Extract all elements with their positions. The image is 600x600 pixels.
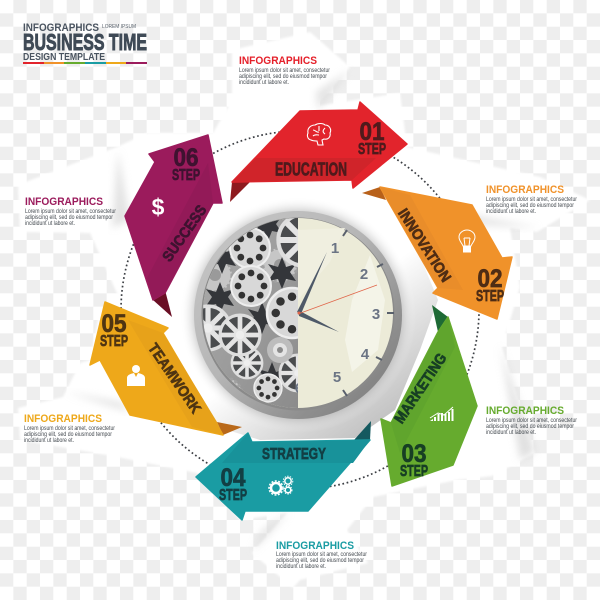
header title: LOREM IPSUM	[102, 24, 136, 30]
gear mechanism half	[203, 218, 298, 408]
arrow 04: strategy: STRATEGY	[262, 446, 326, 463]
icon: light bulb	[459, 230, 475, 252]
text block: yellow: adipiscing elit, sed do eiusmod tempor	[24, 432, 112, 438]
icon: brain	[307, 124, 331, 145]
text block: purple: adipiscing elit, sed do eiusmod tempor	[25, 215, 113, 221]
icon: bar chart	[430, 407, 454, 421]
icon: gears	[269, 476, 293, 495]
clock face: 1	[331, 240, 339, 257]
arrow 04: strategy	[196, 421, 371, 520]
text block: teal: Lorem ipsum dolor sit amet, consectetur	[276, 552, 367, 558]
text block: teal: INFOGRAPHICS	[276, 540, 354, 552]
arrow 03: marketing: 03	[402, 440, 426, 468]
clock face: 3	[372, 306, 380, 323]
arrow 06: success: STEP	[172, 167, 200, 184]
arrow 01: education: STEP	[358, 141, 386, 158]
text block: orange: adipiscing elit, sed do eiusmod tempor	[486, 203, 574, 209]
text block: green	[486, 405, 577, 436]
text block: yellow: incididunt ut labore et.	[24, 438, 74, 444]
header title: INFOGRAPHICS	[23, 22, 99, 34]
arrow 03: marketing: MARKETING	[391, 350, 451, 427]
arrow 05: teamwork: STEP	[100, 333, 128, 350]
text block: purple: Lorem ipsum dolor sit amet, consectetur	[25, 209, 116, 215]
arrow 02: innovation: STEP	[476, 288, 504, 305]
icon: person	[127, 365, 145, 386]
header title	[23, 22, 147, 64]
clock face: 2	[360, 266, 368, 283]
arrow 05: teamwork: TEAMWORK	[144, 340, 204, 417]
text block: orange: incididunt ut labore et.	[486, 209, 536, 215]
arrow 06: success	[125, 135, 222, 317]
clock face	[203, 218, 394, 408]
arrow 02: innovation: 02	[478, 265, 502, 293]
arrow 03: marketing: STEP	[400, 463, 428, 480]
arrow 05: teamwork	[90, 302, 242, 435]
text block: yellow: INFOGRAPHICS	[24, 413, 102, 425]
header title: DESIGN TEMPLATE	[23, 52, 105, 63]
header title: BUSINESS TIME	[23, 29, 147, 55]
arrow 04: strategy: 04	[220, 464, 246, 492]
dotted orbit circle	[121, 131, 479, 489]
arrow 04: strategy: STEP	[219, 487, 247, 504]
clock hands	[297, 252, 377, 332]
arrow 01: education	[230, 102, 407, 202]
icon: dollar sign: $	[152, 194, 165, 220]
tick marks	[343, 230, 394, 396]
text block: purple: incididunt ut labore et.	[25, 221, 75, 227]
text block: red	[239, 55, 330, 86]
text block: teal	[276, 540, 367, 570]
arrow 06: success: SUCCESS	[159, 202, 210, 265]
arrow 03: marketing	[381, 305, 477, 486]
arrow 02: innovation: INNOVATION	[394, 206, 454, 285]
text block: green: incididunt ut labore et.	[486, 430, 536, 436]
text block: yellow	[24, 413, 115, 444]
arrow 01: education: 01	[360, 118, 385, 146]
text block: purple	[25, 196, 116, 227]
clock bezel backing	[158, 184, 438, 440]
text block: red: Lorem ipsum dolor sit amet, consectetur	[239, 68, 330, 74]
text block: red: adipiscing elit, sed do eiusmod tempor	[239, 74, 327, 80]
text block: yellow: Lorem ipsum dolor sit amet, consectetur	[24, 426, 115, 432]
text block: red: INFOGRAPHICS	[239, 55, 317, 67]
clock face: 5	[333, 369, 341, 386]
clock face: 4	[361, 346, 370, 363]
text block: purple: INFOGRAPHICS	[25, 196, 103, 208]
text block: orange: INFOGRAPHICS	[486, 184, 564, 196]
text block: green: Lorem ipsum dolor sit amet, consectetur	[486, 418, 577, 424]
arrow 06: success: 06	[174, 144, 198, 172]
arrow 02: innovation	[362, 187, 512, 319]
gear mechanism half: 6	[295, 380, 303, 397]
arrow 01: education: EDUCATION	[275, 160, 347, 180]
text block: orange: Lorem ipsum dolor sit amet, consectetur	[486, 197, 577, 203]
text block: teal: adipiscing elit, sed do eiusmod tempor	[276, 558, 364, 564]
clock	[186, 204, 407, 422]
text block: teal: incididunt ut labore et.	[276, 564, 326, 570]
gear mechanism half: 2	[298, 230, 306, 247]
text block: red: incididunt ut labore et.	[239, 80, 289, 86]
text block: orange	[486, 184, 577, 215]
arrow 05: teamwork: 05	[102, 310, 127, 338]
text block: green: INFOGRAPHICS	[486, 405, 564, 417]
text block: green: adipiscing elit, sed do eiusmod tempor	[486, 424, 574, 430]
